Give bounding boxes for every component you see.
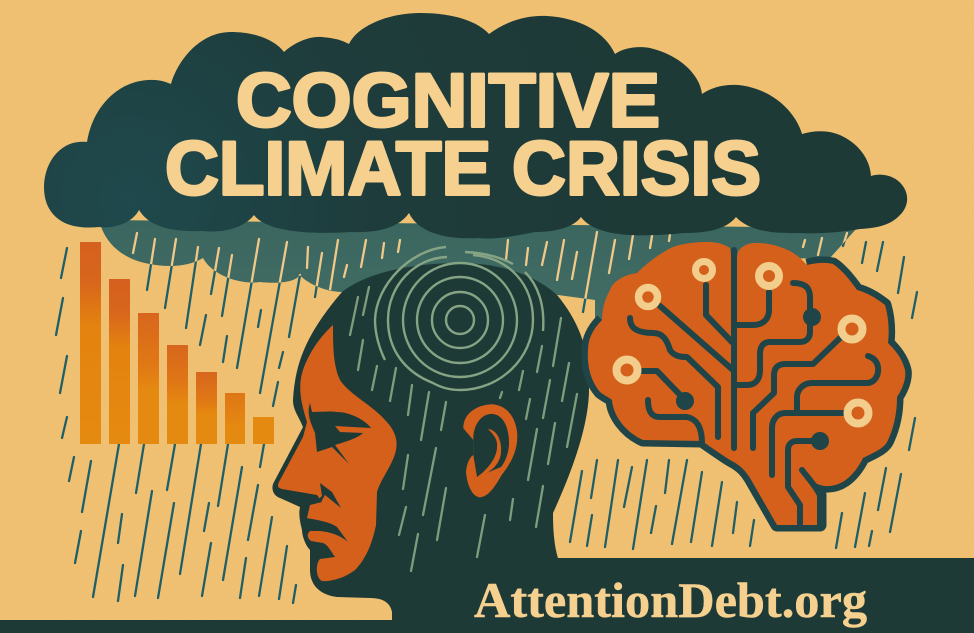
lighter rain cloud underside: [99, 220, 857, 330]
dark storm cloud: [44, 13, 907, 239]
website url: AttentionDebt.org: [474, 572, 867, 628]
concentric spiral rings: [375, 247, 543, 390]
title: CLIMATE CRISIS: [165, 126, 761, 212]
eye and brow: [309, 403, 371, 464]
cream ring nodes: [616, 262, 868, 424]
brain fill: [588, 242, 905, 525]
head silhouette with footer band: [0, 263, 974, 633]
nose crease: [314, 483, 341, 508]
brain outline: [588, 263, 905, 525]
rain over paper: [56, 230, 917, 603]
title: COGNITIVE: [236, 58, 660, 144]
rain over cloud underside: [132, 230, 848, 299]
title: [165, 58, 761, 212]
rain inside head: [350, 287, 577, 571]
face: [278, 325, 397, 581]
brain with circuit traces: [588, 242, 905, 526]
circuit traces: [630, 250, 878, 526]
bar chart: declining attention: [80, 242, 274, 444]
circuit nodes: [676, 308, 829, 450]
mouth: [306, 518, 348, 542]
ear: [463, 404, 517, 497]
